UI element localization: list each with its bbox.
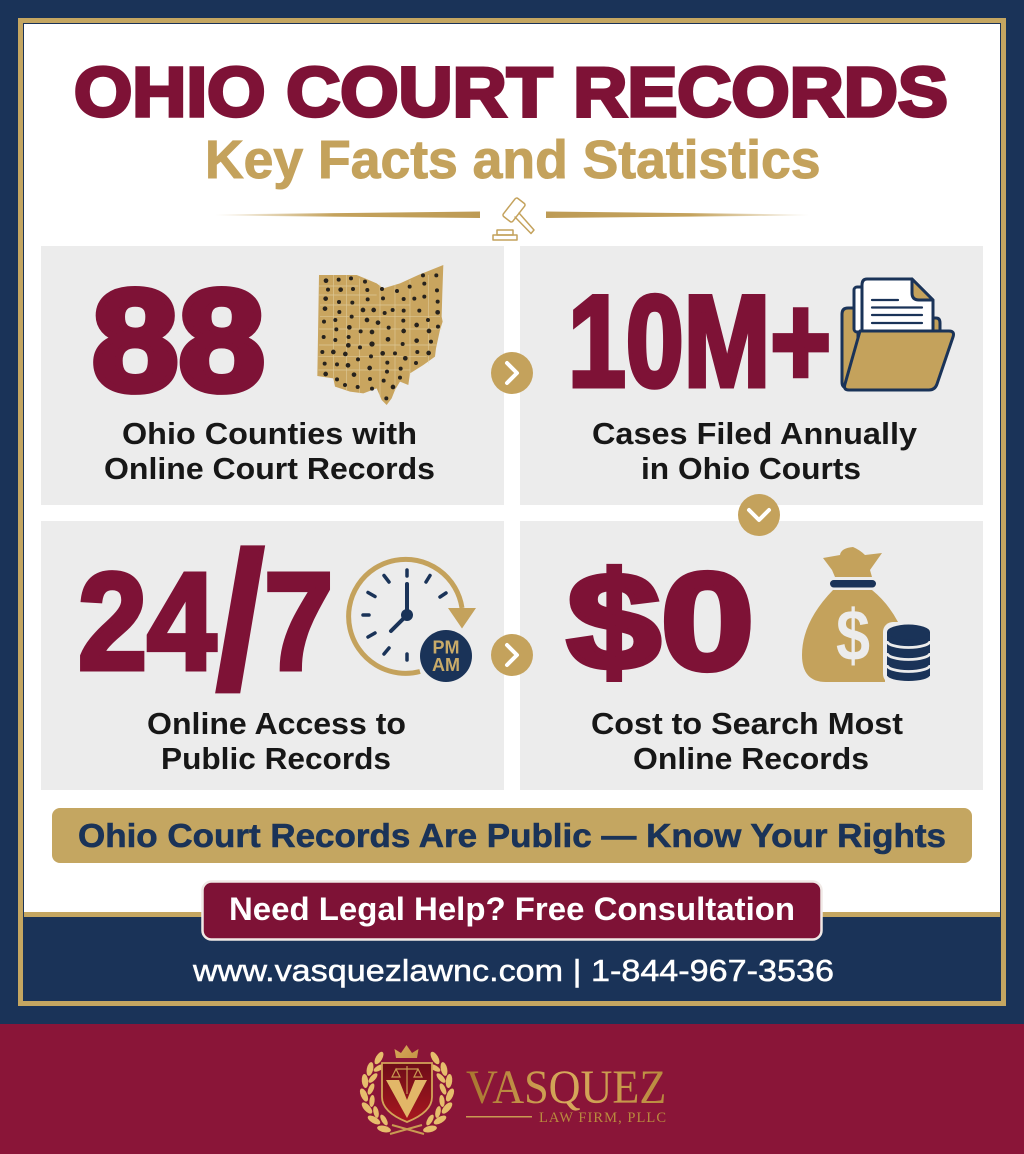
label: online access: Online Access to — [147, 706, 406, 741]
label: cost — [591, 706, 903, 776]
panel: cost — [520, 521, 983, 790]
gold line above contact band — [24, 912, 1000, 917]
stat: 24/7: 7 — [264, 544, 333, 698]
icon: folder with document — [842, 279, 954, 390]
icon: clock with PM AM badge: AM — [432, 655, 460, 675]
label: counties: Ohio Counties with — [122, 416, 417, 451]
label: cases filed — [592, 416, 918, 486]
divider with gavel icon — [215, 197, 809, 240]
panel: counties — [41, 246, 504, 505]
label: online access: Public Records — [161, 741, 391, 776]
banner: public records — [52, 808, 972, 863]
label: cost: Online Records — [633, 741, 869, 776]
icon: Ohio county map — [317, 265, 443, 405]
panel: cases filed — [520, 246, 983, 505]
stat: 88: 88 — [92, 259, 265, 421]
icon: money bag with coins — [802, 547, 934, 684]
icon: crown — [394, 1045, 418, 1058]
stat: 24/7: 24 — [78, 544, 216, 698]
button: free consultation: Need Legal Help? Free Consultation — [229, 891, 795, 927]
icon: shield with scales and V — [382, 1063, 432, 1122]
label: cases filed: Cases Filed Annually — [592, 416, 918, 451]
footer band — [0, 1024, 1024, 1154]
arrow: down from cases to cost — [738, 494, 780, 536]
icon: clock with PM AM badge: PM — [432, 638, 460, 658]
icon: clock with PM AM badge — [349, 559, 476, 682]
contact line: www.vasquezlawnc.com | 1-844-967-3536 — [192, 953, 834, 988]
white content panel — [24, 24, 1000, 912]
stat: 24/7: / — [216, 514, 264, 728]
panel: online access — [41, 514, 504, 790]
banner: public records: Ohio Court Records Are Public — Know Your Rights — [78, 817, 946, 854]
label: online access — [147, 706, 406, 776]
icon: gavel — [493, 197, 534, 240]
button: free consultation — [202, 882, 822, 940]
label: counties — [104, 416, 435, 486]
arrow: right from counties to cases — [491, 352, 533, 394]
logo: Vasquez Law Firm — [358, 1045, 666, 1134]
icon: money bag with coins: $ — [836, 596, 870, 676]
logo: Vasquez Law Firm: LAW FIRM, PLLC — [539, 1110, 666, 1126]
label: counties: Online Court Records — [104, 451, 435, 486]
arrow: right from access to cost — [491, 634, 533, 676]
wordmark: VASQUEZ — [466, 1060, 666, 1113]
label: cases filed: in Ohio Courts — [641, 451, 861, 486]
subtitle: Key Facts and Statistics — [205, 131, 820, 190]
icon: laurel wreath — [358, 1050, 456, 1134]
title: OHIO COURT RECORDS — [74, 53, 948, 131]
stat: 10M+: 10M+ — [568, 268, 831, 414]
label: cost: Cost to Search Most — [591, 706, 903, 741]
stat: $0: $0 — [567, 544, 754, 699]
